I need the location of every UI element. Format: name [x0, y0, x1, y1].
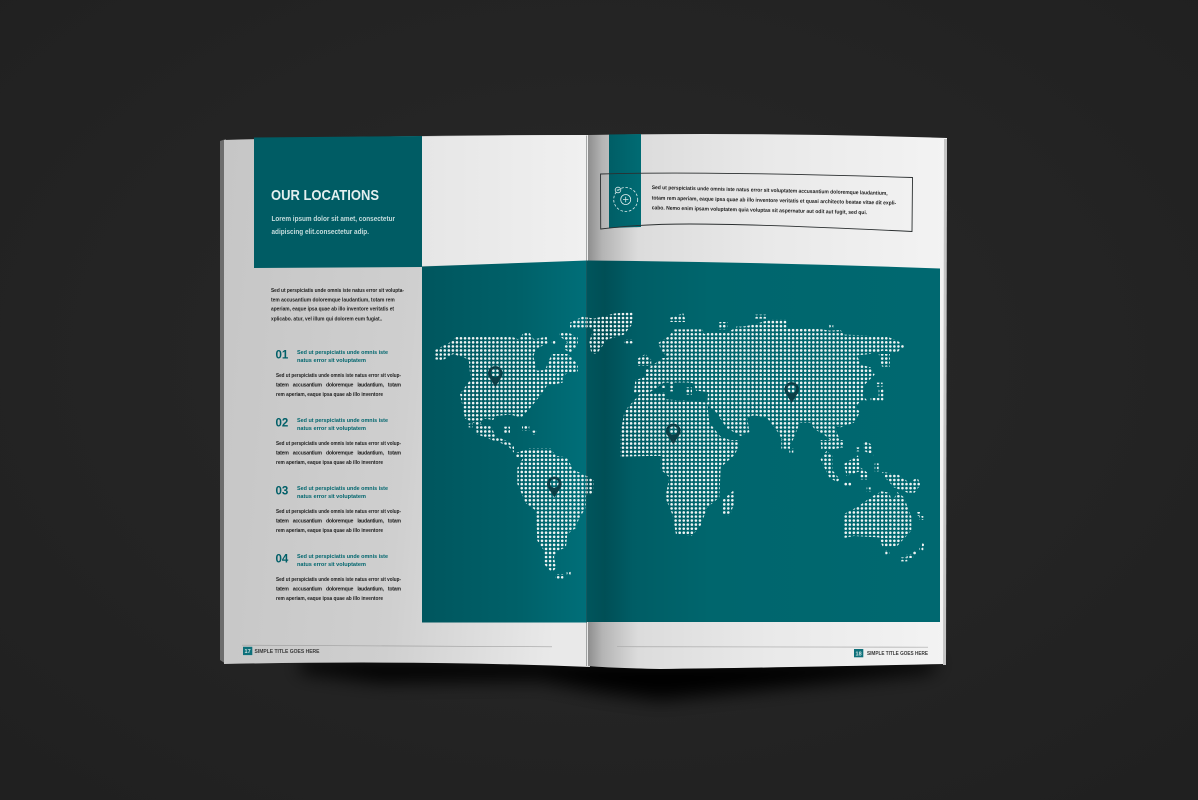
list item 04: Sed ut perspiciatis unde omnis iste	[297, 554, 388, 560]
list item 01: Sed ut perspiciatis unde omnis iste	[297, 350, 388, 356]
list item 03: tatem accusantium doloremque laudantium, totam	[276, 518, 401, 524]
panel: right page	[588, 134, 947, 669]
panel: title block	[254, 136, 422, 268]
callout box	[600, 173, 912, 232]
list item 03: Sed ut perspiciatis unde omnis iste natus error sit volup-	[276, 509, 401, 515]
icon: map pin Africa	[666, 424, 681, 444]
list item 03	[276, 486, 401, 534]
page number 18: 18	[856, 651, 862, 657]
list item 01: Sed ut perspiciatis unde omnis iste natus error sit volup-	[276, 373, 401, 379]
icon: map pin South America	[547, 477, 562, 498]
icon: map pin North America	[488, 366, 503, 387]
panel: teal map background	[422, 260, 940, 622]
list item 02: Sed ut perspiciatis unde omnis iste	[297, 418, 388, 424]
list item 04: natus error sit voluptatem	[297, 562, 366, 568]
icon: map pin Asia	[784, 382, 799, 403]
footer left	[242, 645, 552, 655]
list item 01: 01	[276, 350, 289, 362]
panel: intro text	[271, 288, 404, 322]
callout text	[652, 185, 896, 216]
icon: plus in dashed circle	[614, 187, 638, 212]
spine line	[586, 136, 588, 666]
footer right: SIMPLE TITLE GOES HERE	[867, 651, 928, 657]
callout text: cabo. Nemo enim ipsam voluptatem quia voluptas sit aspernatur aut odit aut fugit, sed qui.	[652, 205, 868, 216]
list item 03: rem aperiam, eaque ipsa quae ab illo inventore	[276, 528, 383, 534]
list item 01: rem aperiam, eaque ipsa quae ab illo inventore	[276, 392, 383, 398]
world map of dots	[429, 310, 925, 577]
list item 02: 02	[276, 418, 288, 430]
page number 17	[243, 647, 252, 655]
callout text: totam rem aperiam, eaque ipsa quae ab illo inventore veritatis et quasi architecto beatae vitae dit expli-	[652, 196, 896, 207]
panel: intro text: tem accusantium doloremque laudantium, totam rem	[271, 298, 395, 304]
list item 03: Sed ut perspiciatis unde omnis iste	[297, 486, 388, 492]
title: OUR LOCATIONS	[271, 187, 379, 204]
list item 02	[276, 418, 401, 466]
list item 02: tatem accusantium doloremque laudantium, totam	[276, 450, 401, 456]
footer left: SIMPLE TITLE GOES HERE	[254, 649, 320, 655]
subtitle	[272, 214, 395, 236]
magazine shadow	[300, 660, 940, 700]
panel: left page	[224, 135, 590, 667]
list item 03: natus error sit voluptatem	[297, 494, 366, 500]
list item 04	[276, 554, 401, 602]
footer right	[617, 647, 928, 657]
panel: intro text: xplicabo. atur, vel illum qui dolorem eum fugiat..	[271, 316, 383, 322]
panel: intro text: Sed ut perspiciatis unde omnis iste natus error sit volupta-	[271, 288, 404, 294]
list item 02: Sed ut perspiciatis unde omnis iste natus error sit volup-	[276, 441, 401, 447]
list item 01	[276, 350, 401, 398]
panel: intro text: aperiam, eaque ipsa quae ab illo inventore veritatis et	[271, 307, 394, 313]
list item 02: rem aperiam, eaque ipsa quae ab illo inventore	[276, 460, 383, 466]
list item 04: rem aperiam, eaque ipsa quae ab illo inventore	[276, 596, 383, 602]
teal strip top right	[609, 134, 641, 228]
list item 03: 03	[276, 486, 288, 498]
list item 04: tatem accusantium doloremque laudantium, totam	[276, 586, 401, 592]
list item 04: 04	[276, 554, 289, 566]
list item 01: tatem accusantium doloremque laudantium, totam	[276, 382, 401, 388]
page number 17: 17	[245, 649, 251, 655]
subtitle: adipiscing elit.consectetur adip.	[272, 227, 369, 236]
subtitle: Lorem ipsum dolor sit amet, consectetur	[272, 214, 395, 223]
brochure spread	[220, 134, 947, 669]
callout text: Sed ut perspiciatis unde omnis iste natus error sit voluptatem accusantium doloremque laudantium,	[652, 185, 888, 197]
page number 18	[854, 649, 863, 657]
list item 01: natus error sit voluptatem	[297, 358, 366, 364]
list item 02: natus error sit voluptatem	[297, 426, 366, 432]
list item 04: Sed ut perspiciatis unde omnis iste natus error sit volup-	[276, 577, 401, 583]
left page edge stack	[220, 139, 226, 664]
